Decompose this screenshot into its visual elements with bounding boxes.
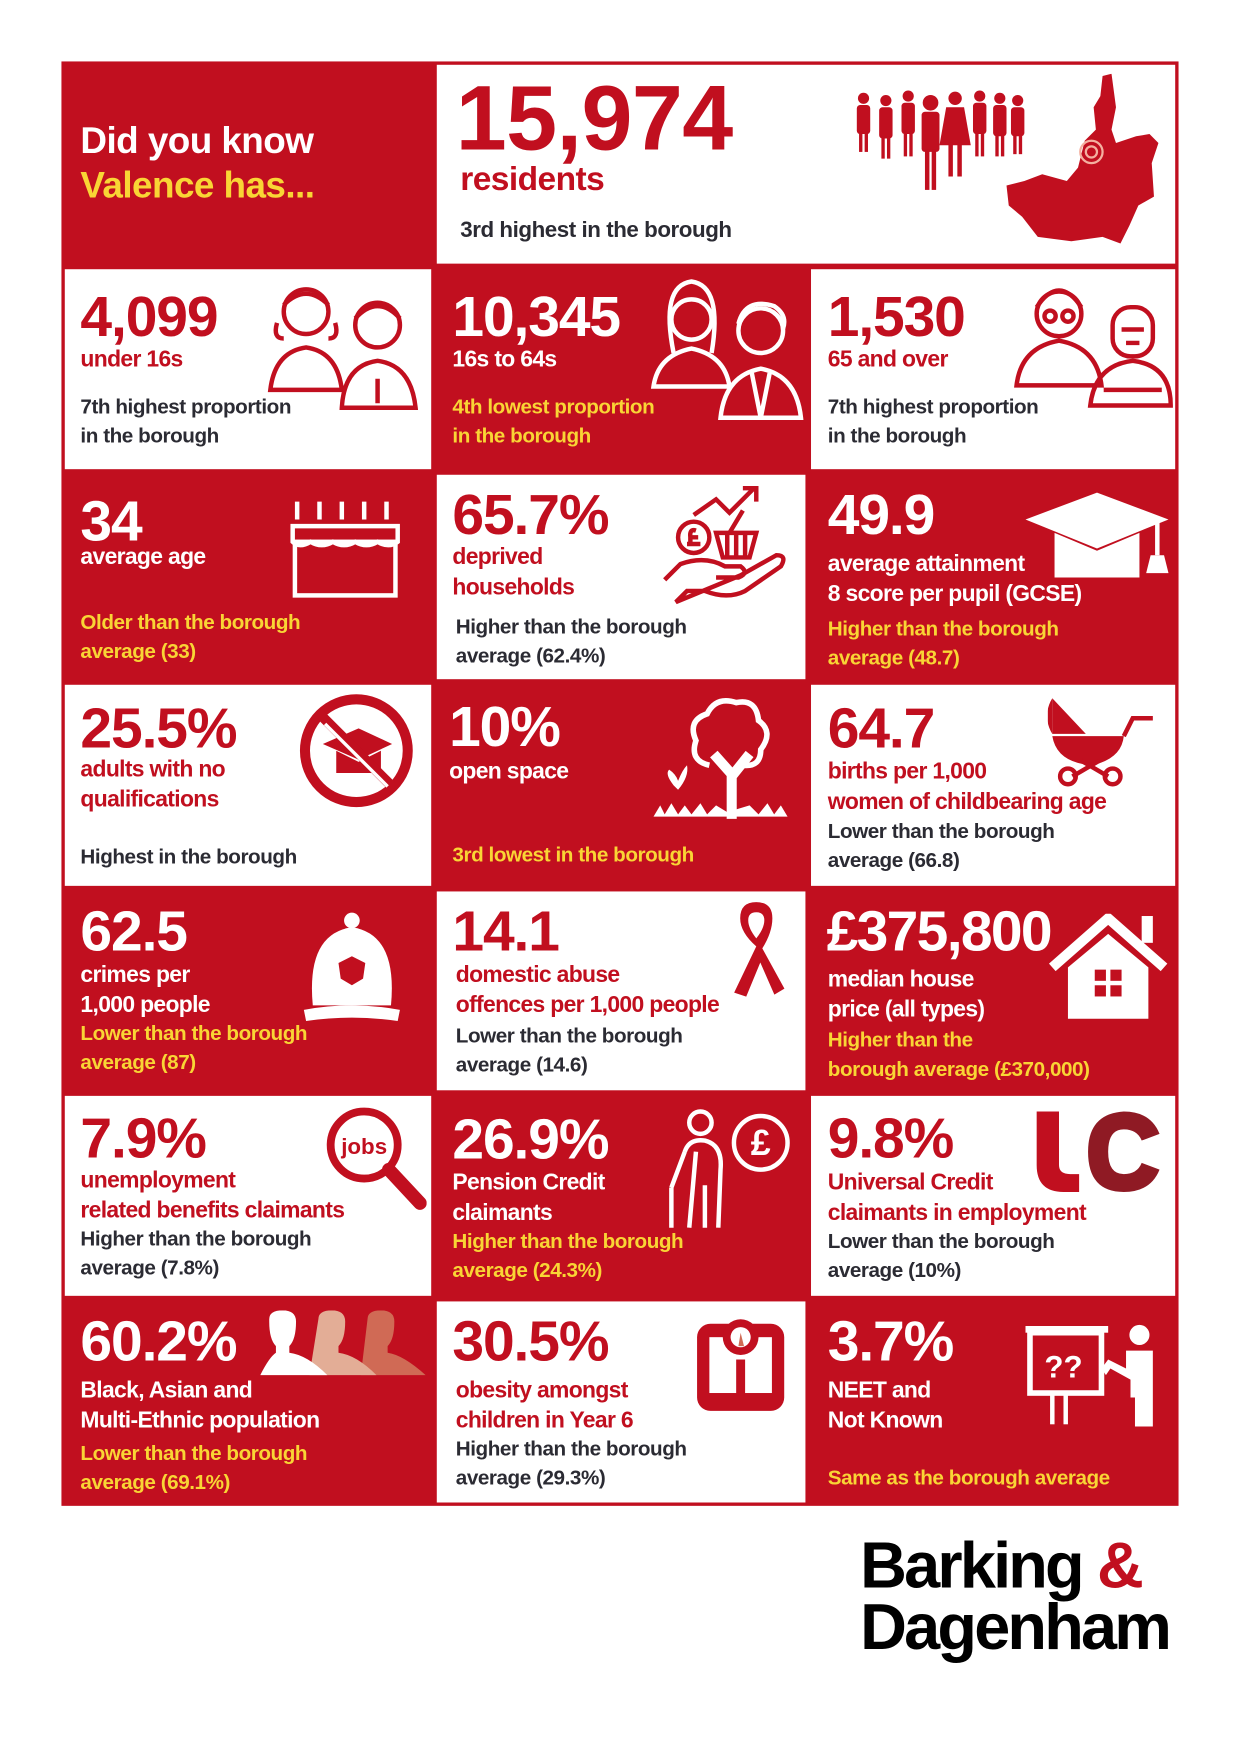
panel: crimes: crimes per	[80, 962, 190, 988]
panel: pension credit: 26.9%	[452, 1107, 608, 1171]
icon: no education sign	[300, 694, 413, 808]
heading: did you know	[80, 120, 314, 206]
icon: house	[1049, 914, 1168, 1019]
panel: deprived households: households	[452, 574, 574, 600]
panel: domestic abuse: domestic abuse	[456, 962, 619, 988]
panel: NEET: Not Known	[828, 1408, 943, 1433]
panel: no qualifications: 25.5%	[80, 696, 236, 760]
panel: house price: borough average (£370,000)	[828, 1057, 1090, 1080]
panel: births: women of childbearing age	[828, 789, 1106, 814]
panel: unemployment: Higher than the borough	[80, 1227, 311, 1250]
panel: 16s to 64s: 16s to 64s	[452, 346, 556, 372]
panel: unemployment: unemployment	[80, 1167, 235, 1193]
panel: domestic abuse	[437, 891, 805, 1090]
icon: hand with basket	[663, 486, 786, 604]
panel: average age: Older than the borough	[80, 610, 300, 633]
label: residents: residents	[460, 161, 604, 198]
panel: under 16s: under 16s	[80, 346, 183, 372]
icon: crowd of people	[856, 90, 1024, 190]
panel: 16s to 64s: 4th lowest proportion	[452, 394, 654, 418]
panel: NEET: NEET and	[828, 1377, 931, 1403]
panel: ethnic population: 60.2%	[80, 1309, 236, 1373]
icon: jobs magnifier	[326, 1108, 427, 1210]
panel: deprived households: Higher than the borough	[456, 614, 687, 638]
panel: house price: price (all types)	[828, 996, 984, 1022]
panel: unemployment: average (7.8%)	[80, 1256, 219, 1279]
heading: did you know: Did you know	[80, 120, 313, 161]
panel: unemployment	[65, 1096, 431, 1296]
panel: ethnic population: Multi-Ethnic population	[80, 1408, 319, 1433]
panel: ethnic population: average (69.1%)	[80, 1470, 230, 1494]
logo: Barking & Dagenham	[860, 1529, 1169, 1663]
panel: 65 and over: 65 and over	[828, 346, 948, 372]
panel: obesity	[437, 1301, 805, 1502]
panel: open space: open space	[449, 759, 568, 784]
panel: obesity: children in Year 6	[456, 1408, 633, 1433]
panel: crimes: Lower than the borough	[80, 1021, 307, 1044]
panel: crimes: 1,000 people	[80, 992, 210, 1018]
panel: average attainment: 8 score per pupil (GCSE)	[828, 581, 1081, 607]
panel: ethnic population	[80, 1309, 426, 1494]
panel: deprived households	[437, 475, 805, 679]
panel: births	[811, 685, 1175, 886]
panel: pension credit: Higher than the borough	[452, 1229, 683, 1252]
icon: scales	[697, 1319, 784, 1411]
panel: ethnic population: Black, Asian and	[80, 1377, 252, 1403]
icon: tree and butterfly	[654, 698, 788, 819]
panel: crimes: average (87)	[80, 1050, 196, 1074]
panel: obesity: 30.5%	[452, 1309, 608, 1373]
panel: deprived households: deprived	[452, 544, 543, 570]
panel: pension credit: claimants	[452, 1200, 552, 1225]
panel: universal credit: 9.8%	[828, 1106, 953, 1170]
logo: Barking & Dagenham: Barking &	[860, 1529, 1141, 1602]
panel: pension credit	[452, 1107, 790, 1281]
icon: UC logo	[1036, 1112, 1160, 1192]
panel: ethnic population: Lower than the borough	[80, 1441, 307, 1465]
number: 15,974: 15,974	[456, 68, 733, 170]
icon: graduation cap	[1026, 492, 1168, 578]
logo: Barking & Dagenham: Dagenham	[860, 1591, 1169, 1663]
panel: open space	[449, 695, 788, 866]
icon: presenter with board	[1026, 1324, 1153, 1426]
panel: average attainment	[828, 483, 1168, 669]
panel: residents	[437, 65, 1175, 264]
panel: crimes: 62.5	[80, 899, 187, 963]
panel: average attainment: 49.9	[828, 483, 934, 546]
icon: children	[268, 287, 418, 410]
panel: under 16s	[65, 269, 431, 469]
panel: 16s to 64s: in the borough	[452, 423, 591, 447]
panel: average attainment: average (48.7)	[828, 646, 959, 669]
panel: no qualifications: Highest in the borough	[80, 845, 297, 868]
panel: births: average (66.8)	[828, 848, 959, 871]
panel: domestic abuse: average (14.6)	[456, 1052, 587, 1076]
panel: under 16s: 7th highest proportion	[80, 394, 291, 418]
panel: pension credit: Pension Credit	[452, 1170, 605, 1195]
icon: presenter with board: ??	[1044, 1349, 1083, 1384]
panel: no qualifications: qualifications	[80, 786, 219, 812]
panel: house price	[827, 899, 1168, 1080]
panel: domestic abuse: 14.1	[452, 899, 559, 963]
icon: birthday cake	[290, 502, 400, 598]
panel: open space: 10%	[449, 695, 560, 759]
panel: 16s to 64s: 10,345	[452, 285, 620, 349]
panel: domestic abuse: Lower than the borough	[456, 1023, 682, 1047]
panel: open space: 3rd lowest in the borough	[452, 842, 694, 866]
panel: universal credit: claimants in employment	[828, 1200, 1086, 1225]
panel: universal credit: Lower than the borough	[828, 1229, 1054, 1252]
note: 3rd highest: 3rd highest in the borough	[460, 218, 732, 242]
panel: average age	[80, 489, 400, 662]
panel: under 16s: 4,099	[80, 285, 217, 349]
panel: house price: median house	[828, 966, 974, 992]
panel: average attainment: Higher than the borough	[828, 617, 1059, 640]
panel: universal credit: Universal Credit	[828, 1170, 993, 1195]
panel: NEET: Same as the borough average	[828, 1466, 1110, 1489]
panel: obesity: obesity amongst	[456, 1377, 628, 1403]
panel: house price: Higher than the	[828, 1028, 973, 1051]
panel: deprived households: average (62.4%)	[456, 643, 605, 667]
panel: crimes	[80, 899, 400, 1074]
panel: NEET	[828, 1309, 1153, 1489]
panel: no qualifications: adults with no	[80, 756, 225, 782]
panel: universal credit: average (10%)	[828, 1258, 961, 1281]
panel: 65 and over	[811, 269, 1175, 469]
panel: NEET: 3.7%	[828, 1309, 953, 1373]
panel: obesity: average (29.3%)	[456, 1466, 605, 1489]
icon: jobs magnifier: jobs	[340, 1134, 387, 1159]
panel: unemployment: 7.9%	[80, 1106, 206, 1170]
icon: elderly with pound: £	[751, 1123, 771, 1163]
panel: 65 and over: in the borough	[828, 423, 966, 447]
icon: police helmet	[304, 912, 400, 1021]
icon: three heads	[260, 1310, 426, 1376]
icon: older people	[1014, 288, 1173, 408]
icon: ribbon	[734, 902, 784, 997]
panel: universal credit	[811, 1096, 1175, 1296]
panel: no qualifications	[65, 685, 431, 886]
panel: deprived households: 65.7%	[452, 483, 608, 546]
panel: intro	[80, 120, 314, 206]
panel: 65 and over: 7th highest proportion	[828, 394, 1038, 418]
icon: borough map	[1006, 74, 1158, 244]
panel: obesity: Higher than the borough	[456, 1437, 687, 1460]
panel: pension credit: average (24.3%)	[452, 1258, 602, 1281]
heading: did you know: Valence has...	[80, 164, 314, 206]
icon: elderly with pound	[669, 1109, 790, 1228]
panel: average age: 34	[80, 489, 142, 553]
panel: average age: average age	[80, 544, 205, 570]
grid background	[61, 61, 1179, 1506]
icon: adults	[650, 279, 804, 420]
panel: births: 64.7	[828, 696, 934, 760]
panel: average age: average (33)	[80, 639, 196, 662]
panel: house price: £375,800	[827, 899, 1051, 963]
panel: births: births per 1,000	[828, 759, 986, 784]
panel: under 16s: in the borough	[80, 423, 219, 447]
panel: 16s to 64s	[452, 279, 804, 447]
panel: births: Lower than the borough	[828, 819, 1054, 842]
panel: average attainment: average attainment	[828, 551, 1024, 576]
icon: pram	[1048, 698, 1153, 786]
panel: unemployment: related benefits claimants	[80, 1198, 344, 1223]
panel: 65 and over: 1,530	[828, 285, 965, 349]
panel: domestic abuse: offences per 1,000 people	[456, 992, 719, 1018]
